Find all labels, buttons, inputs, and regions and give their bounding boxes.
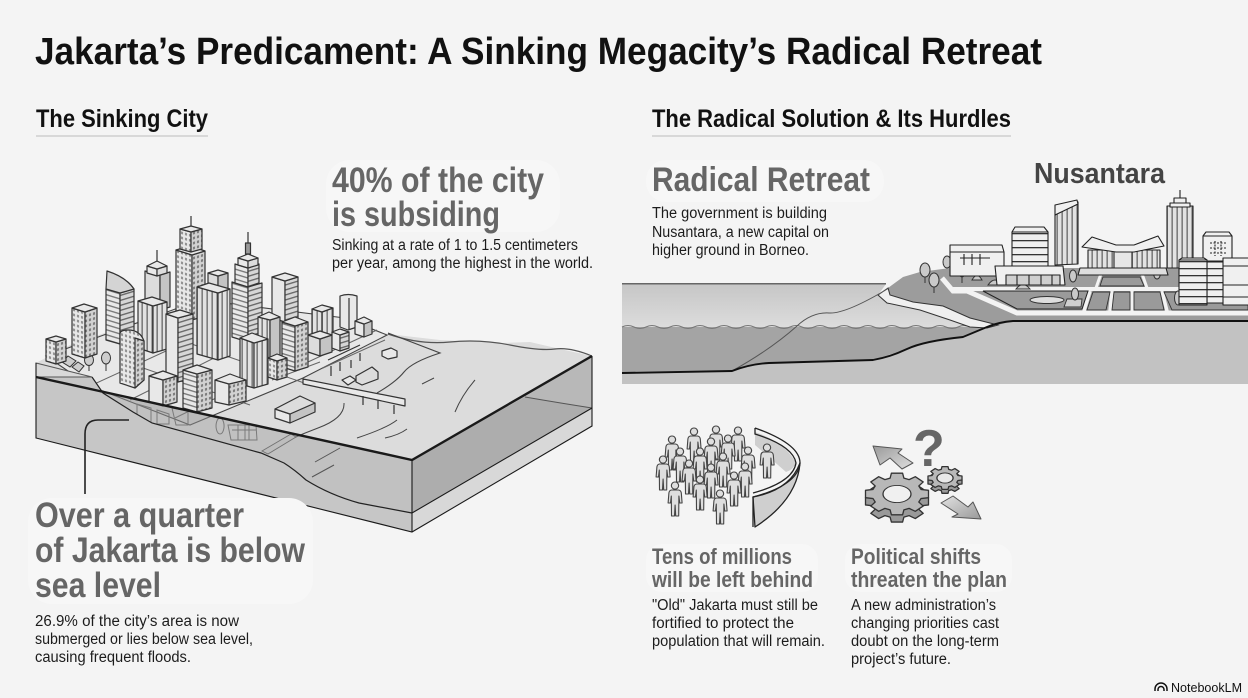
arrow up-left [873,446,913,469]
waterfront: pier, warehouse and houses [275,345,405,423]
arrow down-right [941,496,981,519]
text block: tens of millions: Tens of millions [652,544,792,569]
label: Nusantara: Nusantara [1034,158,1166,190]
callout: over a quarter below sea level: causing frequent floods. [35,649,191,666]
trees [920,256,1182,305]
callout: over a quarter below sea level: submerged or lies below sea level, [35,631,253,648]
callout: 40 percent subsiding: is subsiding [332,195,500,234]
hill and city platform [888,268,1248,325]
callout: over a quarter below sea level: of Jakarta is below [35,531,306,570]
text block: tens of millions [646,544,825,650]
city roads and ground [46,300,387,425]
slope line [732,288,889,371]
small gear [928,467,962,493]
callout: over a quarter below sea level: Over a quarter [35,496,244,535]
callout: radical retreat [646,160,884,259]
callout: over a quarter below sea level [28,496,313,666]
text block: tens of millions: fortified to protect the [652,615,794,632]
block top surface [36,300,592,460]
block outline and sea level line [36,356,592,532]
callout: radical retreat: The government is building [652,205,827,222]
trees and park [62,352,110,372]
text block: political shifts: Political shifts [851,544,981,569]
callout: 40 percent subsiding: 40% of the city [332,161,544,200]
heading: the radical solution and its hurdles: The Radical Solution & Its Hurdles [652,105,1011,133]
capital buildings [950,190,1248,305]
text block: tens of millions: will be left behind [651,567,813,592]
callout: 40 percent subsiding [326,160,593,272]
heading: the sinking city: The Sinking City [36,105,208,133]
beach strip [878,288,998,328]
logo: NotebookLM: NotebookLM [1171,681,1242,695]
large gear [866,473,928,522]
text block: political shifts: project’s future. [851,651,951,668]
callout: radical retreat: Nusantara, a new capital on [652,224,829,241]
text block: political shifts: threaten the plan [851,567,1007,592]
callout: over a quarter below sea level: sea level [35,566,161,605]
right side face [412,356,592,532]
seabed line [622,321,1248,373]
text block: political shifts: doubt on the long-term [851,633,999,650]
callout leader line [85,420,129,494]
text block: political shifts: changing priorities cast [851,615,1000,632]
submerged buildings [137,404,257,440]
icon: crowd and protective sea wall [656,426,800,527]
water cross-section [622,283,998,373]
icon: gears, arrows and question mark [866,420,981,522]
text block: tens of millions: "Old" Jakarta must still be [652,597,818,614]
plaza roads [942,268,1248,313]
callout: 40 percent subsiding: per year, among the highest in the world. [332,255,593,272]
callout: radical retreat: Radical Retreat [652,161,870,199]
callout: 40 percent subsiding: Sinking at a rate of 1 to 1.5 centimeters [332,237,578,254]
illustration: Nusantara coastal cross-section [622,190,1248,384]
text block: tens of millions: population that will remain. [652,633,825,650]
callout: radical retreat: higher ground in Borneo. [652,242,809,259]
front face: land and seabed [36,363,412,532]
illustration: sinking city block diagram [36,216,592,532]
text block: political shifts [845,544,1012,668]
callout: over a quarter below sea level: 26.9% of the city’s area is now [35,613,240,630]
text block: political shifts: A new administration’s [851,597,996,614]
buildings: middle row [120,283,308,412]
seabed and ground [622,321,1248,384]
buildings: back row [46,216,372,364]
question mark: ? [913,420,945,478]
title: Jakarta’s Predicament: A Sinking Megacity’s Radical Retreat [35,31,1042,73]
